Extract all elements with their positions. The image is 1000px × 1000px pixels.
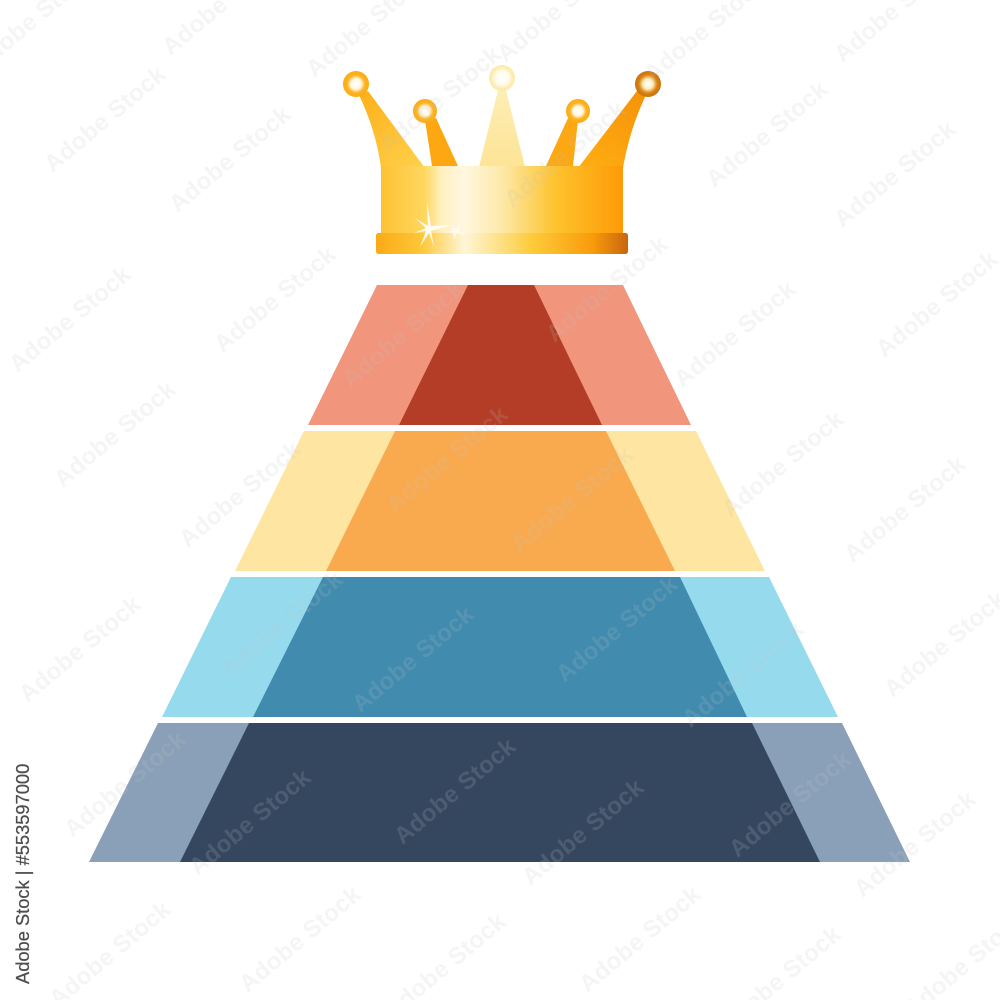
watermark: Adobe Stock: Adobe Stock [216,565,349,683]
watermark: Adobe Stock: Adobe Stock [374,40,507,158]
watermark: Adobe Stock: Adobe Stock [174,435,307,553]
crown band [381,166,623,234]
watermark: Adobe Stock: Adobe Stock [234,880,367,998]
watermark: Adobe Stock: Adobe Stock [506,440,639,558]
watermark: Adobe Stock: Adobe Stock [39,60,172,178]
crown balls [343,65,661,123]
stock id label: Adobe Stock | #553597000 [12,764,33,984]
watermark: Adobe Stock: Adobe Stock [849,785,982,903]
watermark: Adobe Stock: Adobe Stock [347,600,480,718]
tier 4: navy [89,723,910,862]
watermark: Adobe Stock: Adobe Stock [677,615,810,733]
watermark: Adobe Stock: Adobe Stock [14,590,147,708]
watermark: Adobe Stock: Adobe Stock [839,450,972,568]
watermark: Adobe Stock: Adobe Stock [389,732,522,850]
crown base [376,233,628,254]
watermark: Adobe Stock: Adobe Stock [541,230,674,348]
watermark: Adobe Stock: Adobe Stock [184,763,317,881]
tier 2: orange [235,431,765,571]
watermark: Adobe Stock: Adobe Stock [381,400,514,518]
watermark: Adobe Stock: Adobe Stock [551,570,684,688]
watermark: Adobe Stock: Adobe Stock [871,245,1000,363]
watermark: Adobe Stock: Adobe Stock [59,725,192,843]
watermark: Adobe Stock: Adobe Stock [499,95,632,213]
crown spikes [359,90,646,168]
watermark: Adobe Stock: Adobe Stock [337,275,470,393]
watermark: Adobe Stock: Adobe Stock [669,275,802,393]
watermark: Adobe Stock: Adobe Stock [717,405,850,523]
tier 1: red [308,285,691,425]
watermark: Adobe Stock: Adobe Stock [574,880,707,998]
watermark: Adobe Stock: Adobe Stock [701,75,834,193]
watermark: Adobe Stock: Adobe Stock [829,115,962,233]
watermark: Adobe Stock: Adobe Stock [517,773,650,891]
sparkle [414,202,465,247]
watermark: Adobe Stock: Adobe Stock [4,260,137,378]
watermark: Adobe Stock: Adobe Stock [49,375,182,493]
icon: gold crown [343,65,661,254]
pyramid [89,285,910,862]
watermark: Adobe Stock: Adobe Stock [164,100,297,218]
watermark: Adobe Stock: Adobe Stock [209,240,342,358]
tier 3: blue [162,577,838,717]
watermark: Adobe Stock: Adobe Stock [724,745,857,863]
